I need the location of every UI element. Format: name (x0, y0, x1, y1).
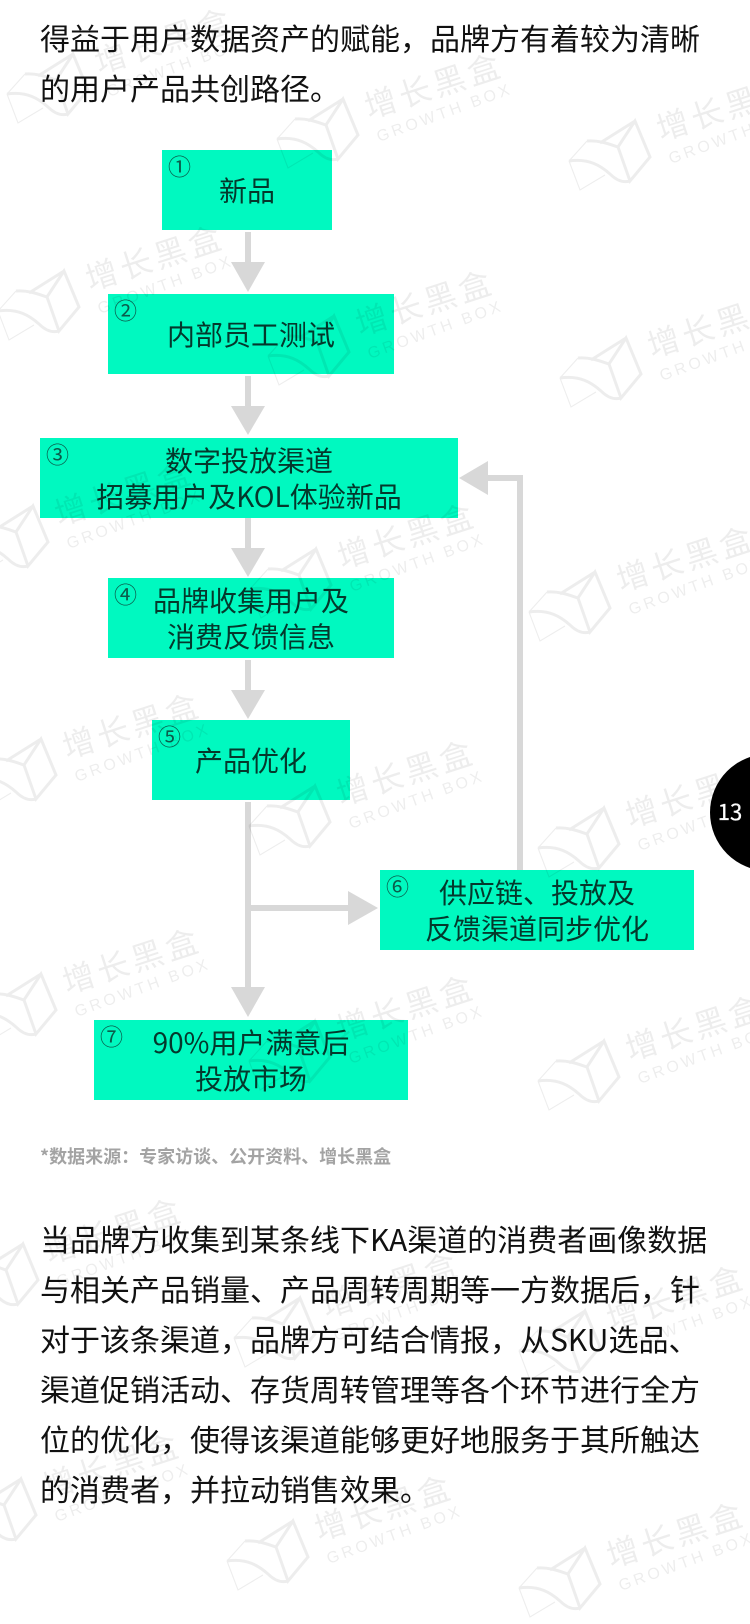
step 7 box: ⑦ (100, 1018, 123, 1052)
arrow: step 6 feedback to step 3 (459, 461, 523, 870)
watermark overlay: GROWTH BOX (73, 721, 213, 786)
watermark overlay: GROWTH BOX (73, 956, 213, 1021)
arrow: step 4 to step 5 (231, 660, 265, 719)
watermark overlay: GROWTH BOX (347, 1003, 487, 1068)
step 1 box (162, 150, 332, 230)
watermark overlay: 增长黑盒 (330, 727, 481, 816)
step 3 box: 数字投放渠道 (165, 440, 333, 480)
watermark overlay: GROWTH BOX (375, 81, 515, 146)
watermark overlay: GROWTH BOX (325, 1503, 465, 1568)
watermark overlay: 增长黑盒 (36, 1420, 187, 1509)
step 5 box: ⑤ (158, 718, 181, 752)
step 5 box: 产品优化 (195, 740, 307, 780)
closing paragraph: 渠道促销活动、存货周转管理等各个环节进行全方 (40, 1366, 700, 1410)
watermark overlay: 增长黑盒 (358, 40, 509, 129)
watermark overlay: 增长黑盒 (308, 1462, 459, 1551)
watermark overlay: 增长黑盒 (330, 962, 481, 1051)
step 4 box: 消费反馈信息 (167, 616, 335, 656)
watermark overlay: GROWTH BOX (347, 768, 487, 833)
closing paragraph: 与相关产品销量、产品周转周期等一方数据后，针 (40, 1266, 700, 1310)
source note: *数据来源：专家访谈、公开资料、增长黑盒 (40, 1143, 391, 1169)
closing paragraph: 的消费者，并拉动销售效果。 (40, 1466, 430, 1510)
page number badge: 13 (718, 795, 742, 827)
watermark overlay: 增长黑盒 (600, 1252, 750, 1341)
step 7 box: 投放市场 (195, 1058, 307, 1098)
step 4 box: ④ (114, 576, 137, 610)
arrow: step 1 to step 2 (231, 232, 265, 292)
step 5 box (152, 720, 350, 800)
step 2 box: ② (114, 292, 137, 326)
watermark overlay: 增长黑盒 (331, 490, 482, 579)
watermark overlay: 增长黑盒 (600, 1489, 750, 1578)
step 4 box (108, 578, 394, 658)
watermark overlay: 增长黑盒 (56, 915, 207, 1004)
intro text: 得益于用户数据资产的赋能，品牌方有着较为清晰 (40, 15, 700, 59)
step 2 box: 内部员工测试 (167, 314, 335, 354)
step 7 box: 90%用户满意后 (153, 1022, 349, 1062)
arrow: step 2 to step 3 (231, 376, 265, 435)
closing paragraph: 位的优化，使得该渠道能够更好地服务于其所触达 (40, 1416, 700, 1460)
watermark overlay: 增长黑盒 (349, 257, 500, 346)
watermark overlay: 增长黑盒 (38, 1185, 189, 1274)
arrow: step 5 to step 7 (231, 802, 265, 1017)
intro text: 的用户产品共创路径。 (40, 65, 340, 109)
watermark overlay: GROWTH BOX (55, 1226, 195, 1291)
page number badge (710, 754, 750, 871)
step 3 box (40, 438, 458, 518)
step 1 box: ① (168, 148, 191, 182)
watermark overlay: 增长黑盒 (56, 680, 207, 769)
closing paragraph: 当品牌方收集到某条线下KA渠道的消费者画像数据 (40, 1216, 707, 1260)
watermark overlay: GROWTH BOX (53, 1461, 193, 1526)
watermark overlay: GROWTH BOX (348, 531, 488, 596)
intro text (40, 15, 700, 109)
step 1 box: 新品 (219, 170, 275, 210)
watermark overlay: GROWTH BOX (105, 36, 245, 101)
step 6 box: ⑥ (386, 868, 409, 902)
step 6 box: 反馈渠道同步优化 (425, 908, 649, 948)
watermark overlay: 增长黑盒 (315, 1239, 466, 1328)
step 6 box (380, 870, 694, 950)
step 6 box: 供应链、投放及 (439, 872, 635, 912)
watermark overlay: GROWTH BOX (366, 298, 506, 363)
arrow: step 3 to step 4 (231, 518, 265, 577)
step 3 box: ③ (46, 436, 69, 470)
closing paragraph: 对于该条渠道，品牌方可结合情报，从SKU选品、 (40, 1316, 698, 1360)
watermark overlay: 增长黑盒 (79, 212, 230, 301)
step 2 box (108, 294, 394, 374)
step 7 box (94, 1020, 408, 1100)
closing paragraph (40, 1216, 707, 1510)
watermark overlay: GROWTH BOX (96, 253, 236, 318)
watermark overlay: GROWTH BOX (65, 488, 205, 553)
watermark overlay: GROWTH BOX (332, 1280, 472, 1345)
step 4 box: 品牌收集用户及 (153, 580, 349, 620)
watermark overlay: 增长黑盒 (48, 447, 199, 536)
step 3 box: 招募用户及KOL体验新品 (96, 476, 402, 516)
arrow: branch to step 6 (251, 891, 378, 925)
